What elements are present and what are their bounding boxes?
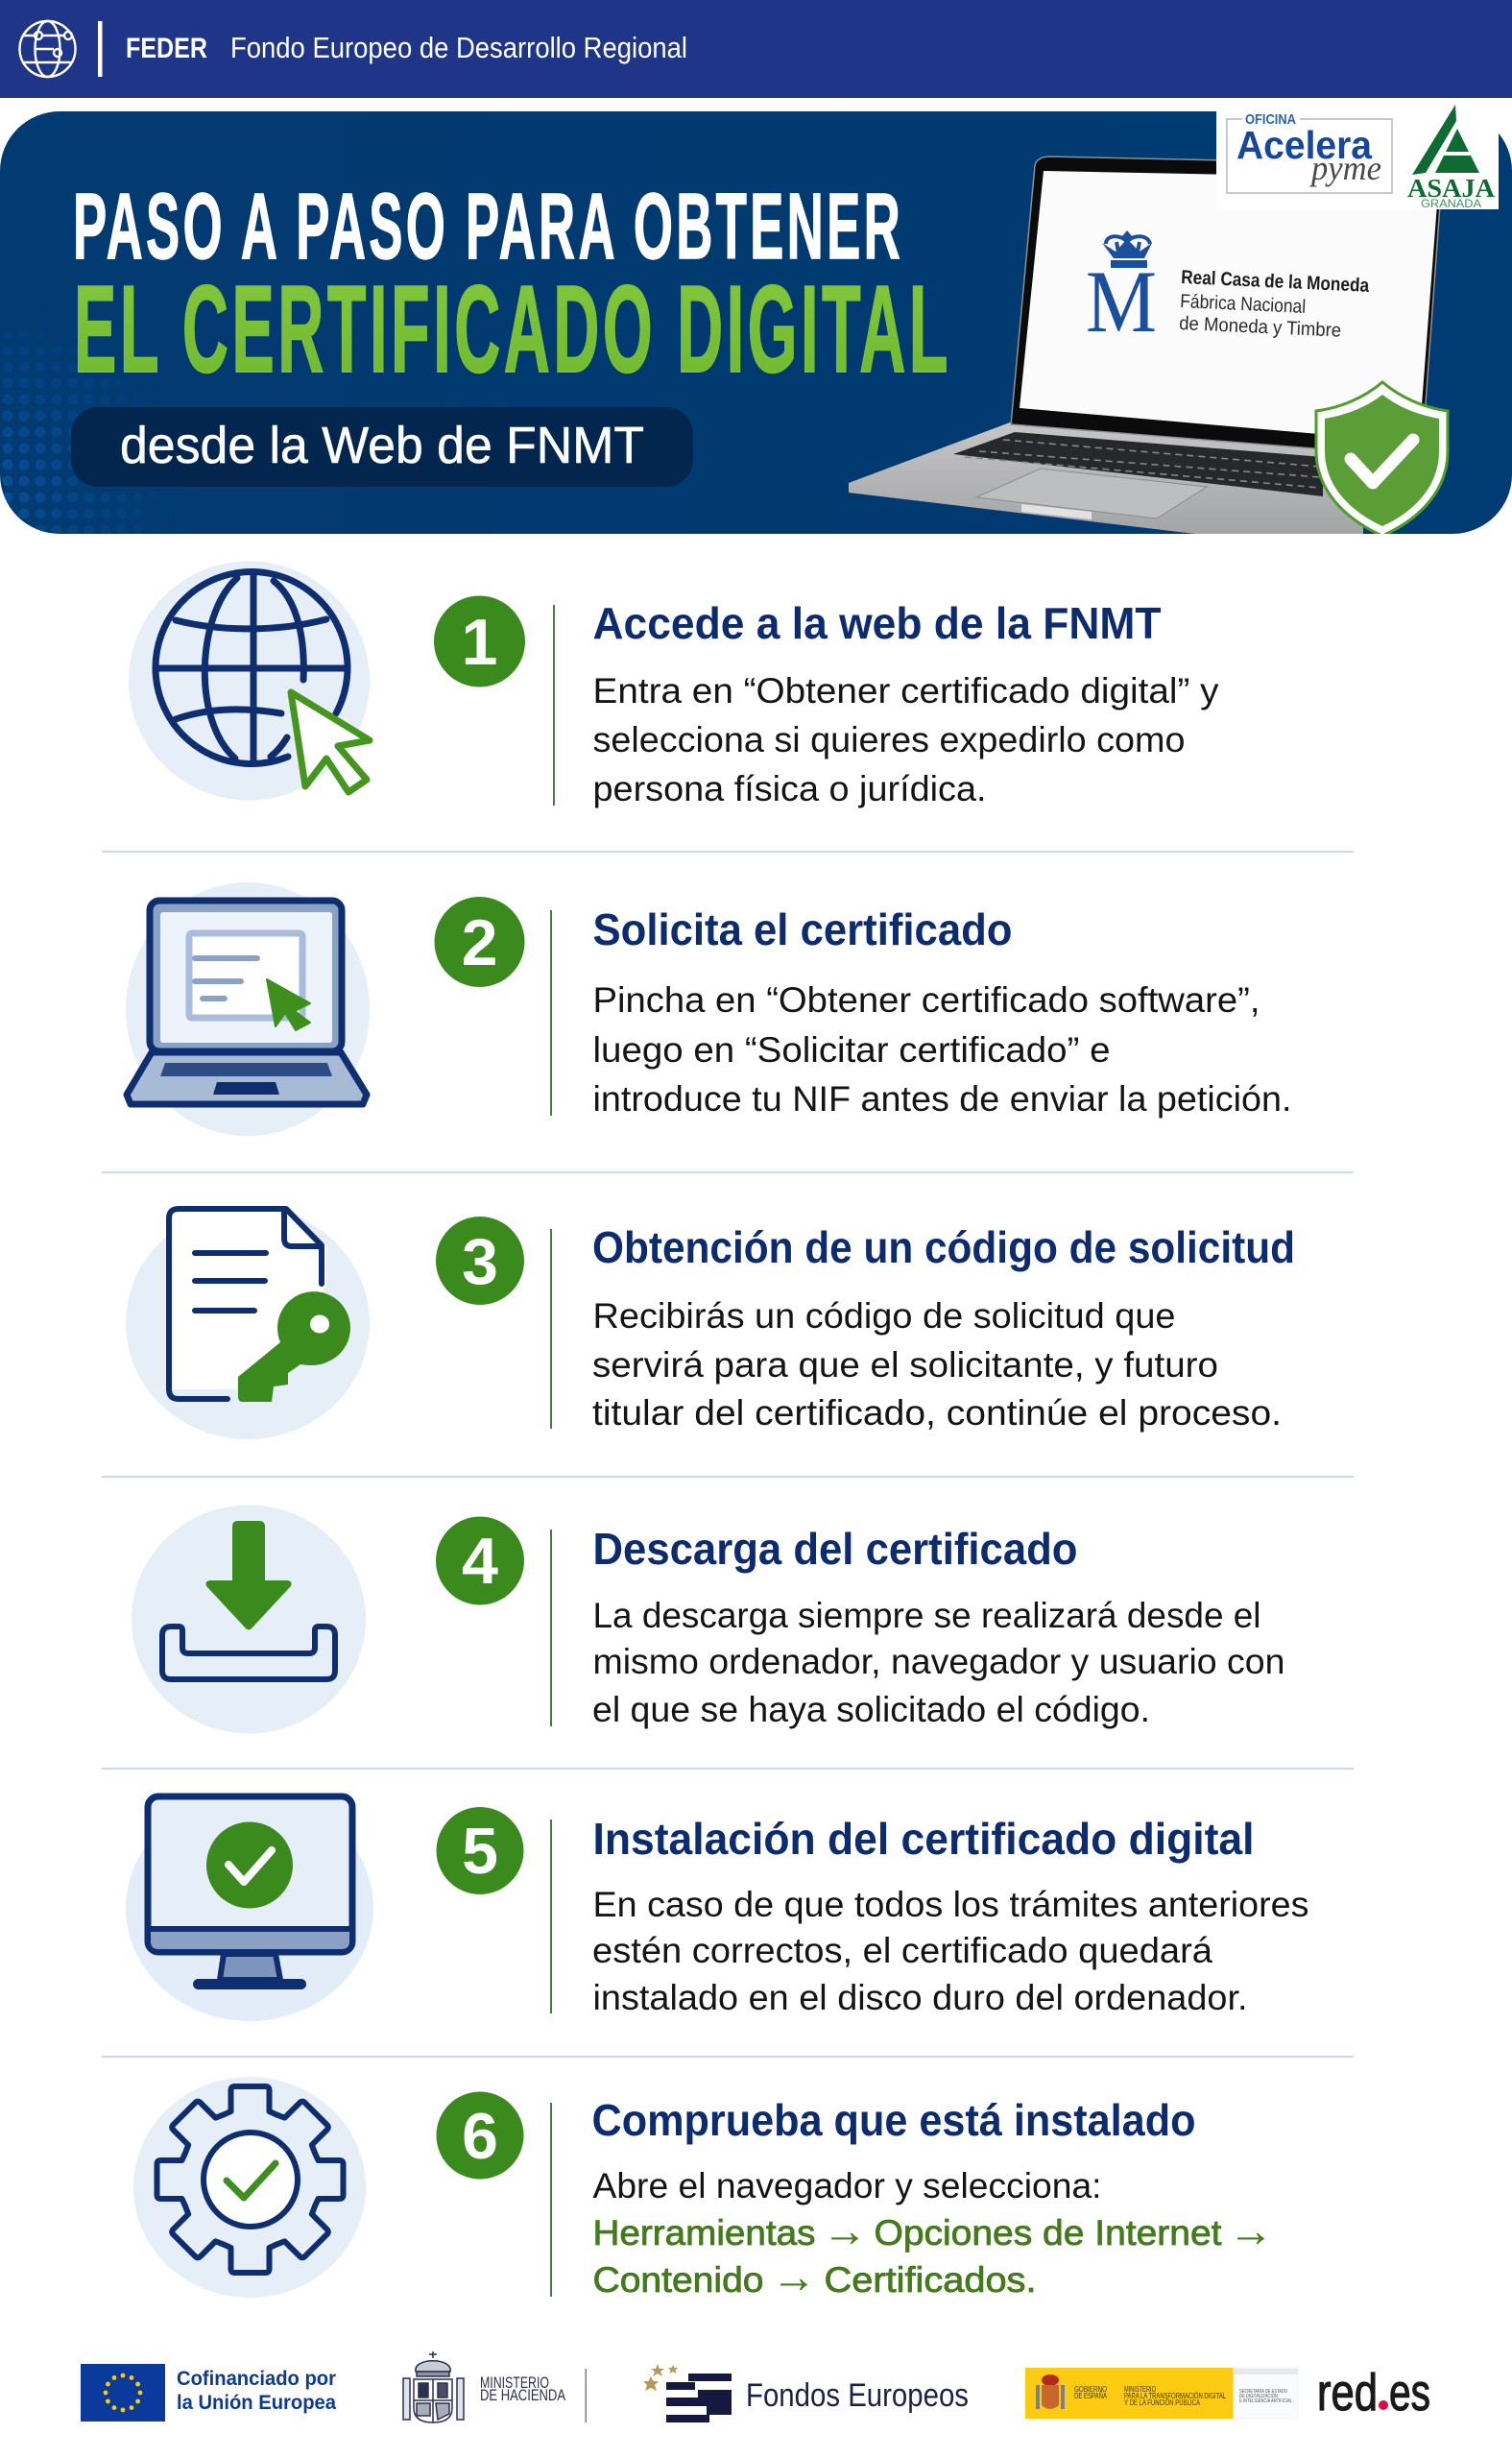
- vertical rule: [553, 605, 555, 806]
- logo: red.es: es: [1389, 2364, 1430, 2422]
- logos panel: Acelera pyme and ASAJA: [1216, 99, 1499, 210]
- step 2 text: Pincha en “Obtener certificado software”,: [593, 980, 1260, 1020]
- logo: Oficina Acelera pyme: OFICINA: [1245, 111, 1296, 128]
- step 1 heading: Accede a la web de la FNMT: [593, 598, 1162, 648]
- footer logos: [81, 2351, 1430, 2422]
- logo: EU co-funding: Cofinanciado por: [177, 2368, 336, 2390]
- logo text line 3: de Moneda y Timbre: [1179, 313, 1342, 342]
- logo: ASAJA Granada: GRANADA: [1421, 197, 1481, 210]
- logo: Ministerio de Hacienda: MINISTERIO: [480, 2374, 549, 2392]
- logo letter: M: [1086, 253, 1157, 350]
- number badge 4: [436, 1517, 524, 1605]
- vertical rule: [550, 1530, 552, 1726]
- header divider: [98, 21, 102, 77]
- logo: Gobierno de España: DE DIGITALIZACIÓN: [1239, 2393, 1278, 2399]
- icon: gear with check: [133, 2077, 366, 2298]
- step 4 text: mismo ordenador, navegador y usuario con: [593, 1642, 1284, 1681]
- step 4 heading: Descarga del certificado: [593, 1524, 1077, 1574]
- logo: Oficina Acelera pyme: [1227, 111, 1392, 193]
- step 2: [126, 882, 1292, 1136]
- number badge 5: 5: [462, 1815, 498, 1888]
- step 6: [133, 2077, 1273, 2301]
- vertical rule: [550, 1229, 552, 1429]
- step 6 text: [593, 2166, 1273, 2301]
- step 4 text: [592, 1596, 1284, 1729]
- icon: globe network: [19, 21, 75, 77]
- step 5 heading: Instalación del certificado digital: [593, 1814, 1254, 1864]
- step 6 text: →: [772, 2252, 816, 2301]
- logo: Gobierno de España: SECRETARÍA DE ESTADO: [1239, 2388, 1288, 2395]
- logo text line 2: Fábrica Nacional: [1180, 291, 1307, 318]
- logo: Gobierno de España: GOBIERNO: [1074, 2384, 1107, 2394]
- step 4: [132, 1506, 1284, 1734]
- step 3 heading: Obtención de un código de solicitud: [592, 1222, 1295, 1272]
- hero subtitle pill: desde la Web de FNMT: [120, 417, 644, 474]
- step 1 text: selecciona si quieres expedirlo como: [593, 720, 1185, 759]
- step 4 text: el que se haya solicitado el código.: [592, 1690, 1150, 1729]
- step 1 text: persona física o jurídica.: [593, 769, 987, 808]
- step 2 heading: Solicita el certificado: [593, 904, 1012, 954]
- step 1 text: [593, 671, 1219, 808]
- logo: Ministerio de Hacienda: [403, 2351, 566, 2422]
- icon: globe with cursor: [129, 561, 370, 801]
- icon: crown: [1102, 230, 1152, 268]
- icon: document with key: [126, 1207, 370, 1439]
- icon: security shield: [1316, 382, 1448, 536]
- logo: Gobierno de España: [1025, 2368, 1298, 2419]
- header bar: [0, 0, 1512, 98]
- header text: fund name: Fondo Europeo de Desarrollo Regional: [230, 31, 687, 64]
- logo: Gobierno de España: MINISTERIO: [1124, 2384, 1156, 2394]
- step 2 text: introduce tu NIF antes de enviar la petición.: [593, 1079, 1292, 1119]
- logo: Fondos Europeos: Fondos Europeos: [746, 2377, 969, 2414]
- number badge 2: [434, 897, 524, 987]
- number badge 2: 2: [462, 906, 497, 979]
- header text: FEDER: FEDER: [126, 33, 207, 64]
- logo: EU co-funding: la Unión Europea: [177, 2392, 336, 2414]
- logo: Gobierno de España: DE ESPAÑA: [1074, 2391, 1107, 2400]
- number badge 6: 6: [462, 2100, 498, 2173]
- step 6 text: Contenido: [593, 2260, 764, 2300]
- illustration: laptop: [849, 157, 1443, 534]
- number badge 3: [436, 1217, 524, 1305]
- step 1: [129, 561, 1219, 808]
- step 5: [126, 1795, 1309, 2021]
- step 3: [126, 1207, 1295, 1439]
- logo: Oficina Acelera pyme: pyme: [1308, 149, 1381, 187]
- number badge 4: 4: [462, 1525, 498, 1598]
- step 5 text: estén correctos, el certificado quedará: [592, 1931, 1212, 1970]
- step 6 text: Certificados.: [824, 2260, 1037, 2300]
- icon: laptop with form: [126, 882, 370, 1136]
- logo: Gobierno de España: PARA LA TRANSFORMACIÓN DIGITAL: [1124, 2391, 1226, 2400]
- number badge 3: 3: [462, 1225, 498, 1298]
- hero subtitle pill: [71, 407, 693, 487]
- step 3 text: titular del certificado, continúe el proceso.: [592, 1393, 1282, 1433]
- step 6 text: →: [823, 2205, 867, 2255]
- number badge 5: [436, 1807, 524, 1894]
- step 2 text: [593, 980, 1292, 1119]
- logo: red.es: [1317, 2364, 1430, 2422]
- vertical rule: [550, 910, 552, 1116]
- logo: FNMT Real Casa de la Moneda: [1088, 230, 1369, 338]
- number badge 1: 1: [462, 606, 497, 679]
- logo: red.es: red: [1317, 2364, 1378, 2422]
- number badge 6: [436, 2091, 524, 2180]
- logo: Gobierno de España: Y DE LA FUNCIÓN PÚBLICA: [1124, 2398, 1200, 2407]
- logo: ASAJA Granada: [1407, 105, 1496, 210]
- step 2 text: luego en “Solicitar certificado” e: [593, 1030, 1110, 1070]
- logo: EU co-funding: [81, 2364, 336, 2422]
- step 1 text: Entra en “Obtener certificado digital” y: [593, 671, 1219, 711]
- vertical rule: [550, 2103, 552, 2297]
- step 5 text: instalado en el disco duro del ordenador.: [593, 1978, 1248, 2017]
- logo: Fondos Europeos: [643, 2364, 969, 2422]
- step 3 text: Recibirás un código de solicitud que: [593, 1296, 1175, 1336]
- vertical rule: [550, 1819, 552, 2013]
- icon: download to tray: [132, 1506, 366, 1734]
- step 3 text: servirá para que el solicitante, y futuro: [592, 1345, 1218, 1385]
- panel: hero banner: [0, 111, 1512, 538]
- step 5 text: [592, 1885, 1309, 2017]
- step 4 text: La descarga siempre se realizará desde el: [593, 1596, 1261, 1635]
- logo: Oficina Acelera pyme: Acelera: [1236, 123, 1373, 167]
- icon: monitor with check: [126, 1795, 373, 2021]
- step 6 text: Herramientas: [593, 2213, 816, 2253]
- logo: Ministerio de Hacienda: DE HACIENDA: [480, 2386, 566, 2404]
- step 6 heading: Comprueba que está instalado: [591, 2095, 1196, 2145]
- logo: ASAJA Granada: ASAJA: [1407, 174, 1496, 203]
- number badge 1: [434, 595, 525, 687]
- logo: Gobierno de España: E INTELIGENCIA ARTIFICIAL: [1239, 2398, 1292, 2404]
- step 6 text: →: [1229, 2205, 1273, 2255]
- step 6 text: Abre el navegador y selecciona:: [593, 2166, 1102, 2205]
- logo text line 1: Real Casa de la Moneda: [1181, 267, 1370, 297]
- step 6 text: Opciones de Internet: [874, 2213, 1222, 2253]
- step 5 text: En caso de que todos los trámites anteriores: [593, 1885, 1309, 1924]
- step 3 text: [592, 1296, 1282, 1433]
